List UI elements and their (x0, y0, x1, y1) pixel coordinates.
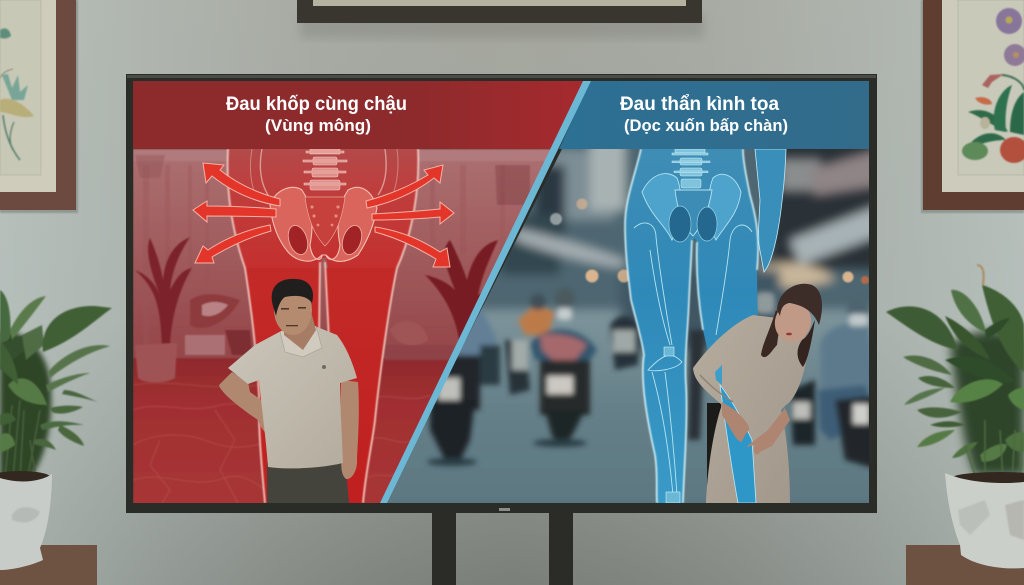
pain radiation arrows (193, 163, 454, 267)
woman: neck, face, hair (761, 310, 778, 358)
woman: hands (722, 402, 790, 454)
panel: sciatica, blue street scene (370, 140, 880, 510)
red body: left leg (245, 268, 320, 503)
scooter riders, centre (505, 288, 640, 447)
arrow: up-left (203, 163, 280, 206)
TV screen (133, 81, 880, 510)
blue body: pelvis bones (642, 174, 741, 240)
man: polo shirt (228, 327, 357, 468)
red translucent body with glowing outline (228, 149, 418, 503)
blue body: torso and legs (625, 149, 758, 503)
heading: sciatica: (Dọc xuốn bấp chàn) (624, 116, 788, 135)
wooden shelf, right (906, 545, 1024, 585)
diagonal divider (380, 81, 591, 503)
framed botanical print, left (0, 0, 78, 213)
TV stand legs (432, 513, 573, 585)
heading: sciatica: Đau thẩn kình tọa (620, 94, 779, 115)
woman: ao dai dress (693, 315, 808, 503)
blue heading band (559, 81, 869, 149)
scooter riders, far left edge (427, 305, 500, 466)
potted plant, right (886, 265, 1024, 568)
heading: sacroiliac joint pain (226, 94, 407, 135)
framed botanical print, right (921, 0, 1024, 213)
heading: sciatica (620, 94, 788, 135)
red heading band (133, 81, 585, 149)
man: trousers (267, 458, 349, 503)
woman: trousers strip (707, 403, 721, 486)
woman in ao dai holding her leg (693, 284, 822, 503)
man: neck and head (284, 315, 316, 350)
red room potted plant, left (135, 237, 252, 382)
arrow: right (372, 202, 454, 224)
pelvis skeleton (270, 149, 377, 261)
heading: sacroiliac joint pain: Đau khốp cùng chậu (226, 94, 407, 115)
blue body: spine (672, 149, 710, 188)
TV brand badge (499, 508, 510, 511)
red body: torso and hips (228, 149, 418, 268)
lumbar spine (303, 149, 347, 190)
red body: right leg (324, 268, 397, 503)
wooden shelf, left (0, 545, 97, 585)
potted plant, left (0, 290, 112, 570)
framed botanical print, top centre (297, 0, 704, 38)
red room potted plant, right (385, 240, 500, 360)
arrow: up-right (366, 165, 443, 208)
man holding lower back (219, 279, 359, 503)
man: arms (219, 372, 359, 479)
scooter riders, right side (688, 292, 880, 470)
blue translucent body with skeleton (625, 149, 786, 503)
red room backdrop (133, 149, 573, 508)
blue body: arm (755, 149, 786, 272)
arrow: down-left (195, 225, 271, 263)
heading: sacroiliac joint pain: (Vùng mông) (265, 116, 371, 135)
street bokeh lights (550, 198, 869, 284)
blurred Hanoi street background (370, 140, 880, 510)
arrow: down-right (375, 227, 450, 267)
arrow: left (193, 201, 276, 222)
panel: sacroiliac joint pain, red scene (133, 149, 573, 508)
TV frame (126, 74, 877, 513)
